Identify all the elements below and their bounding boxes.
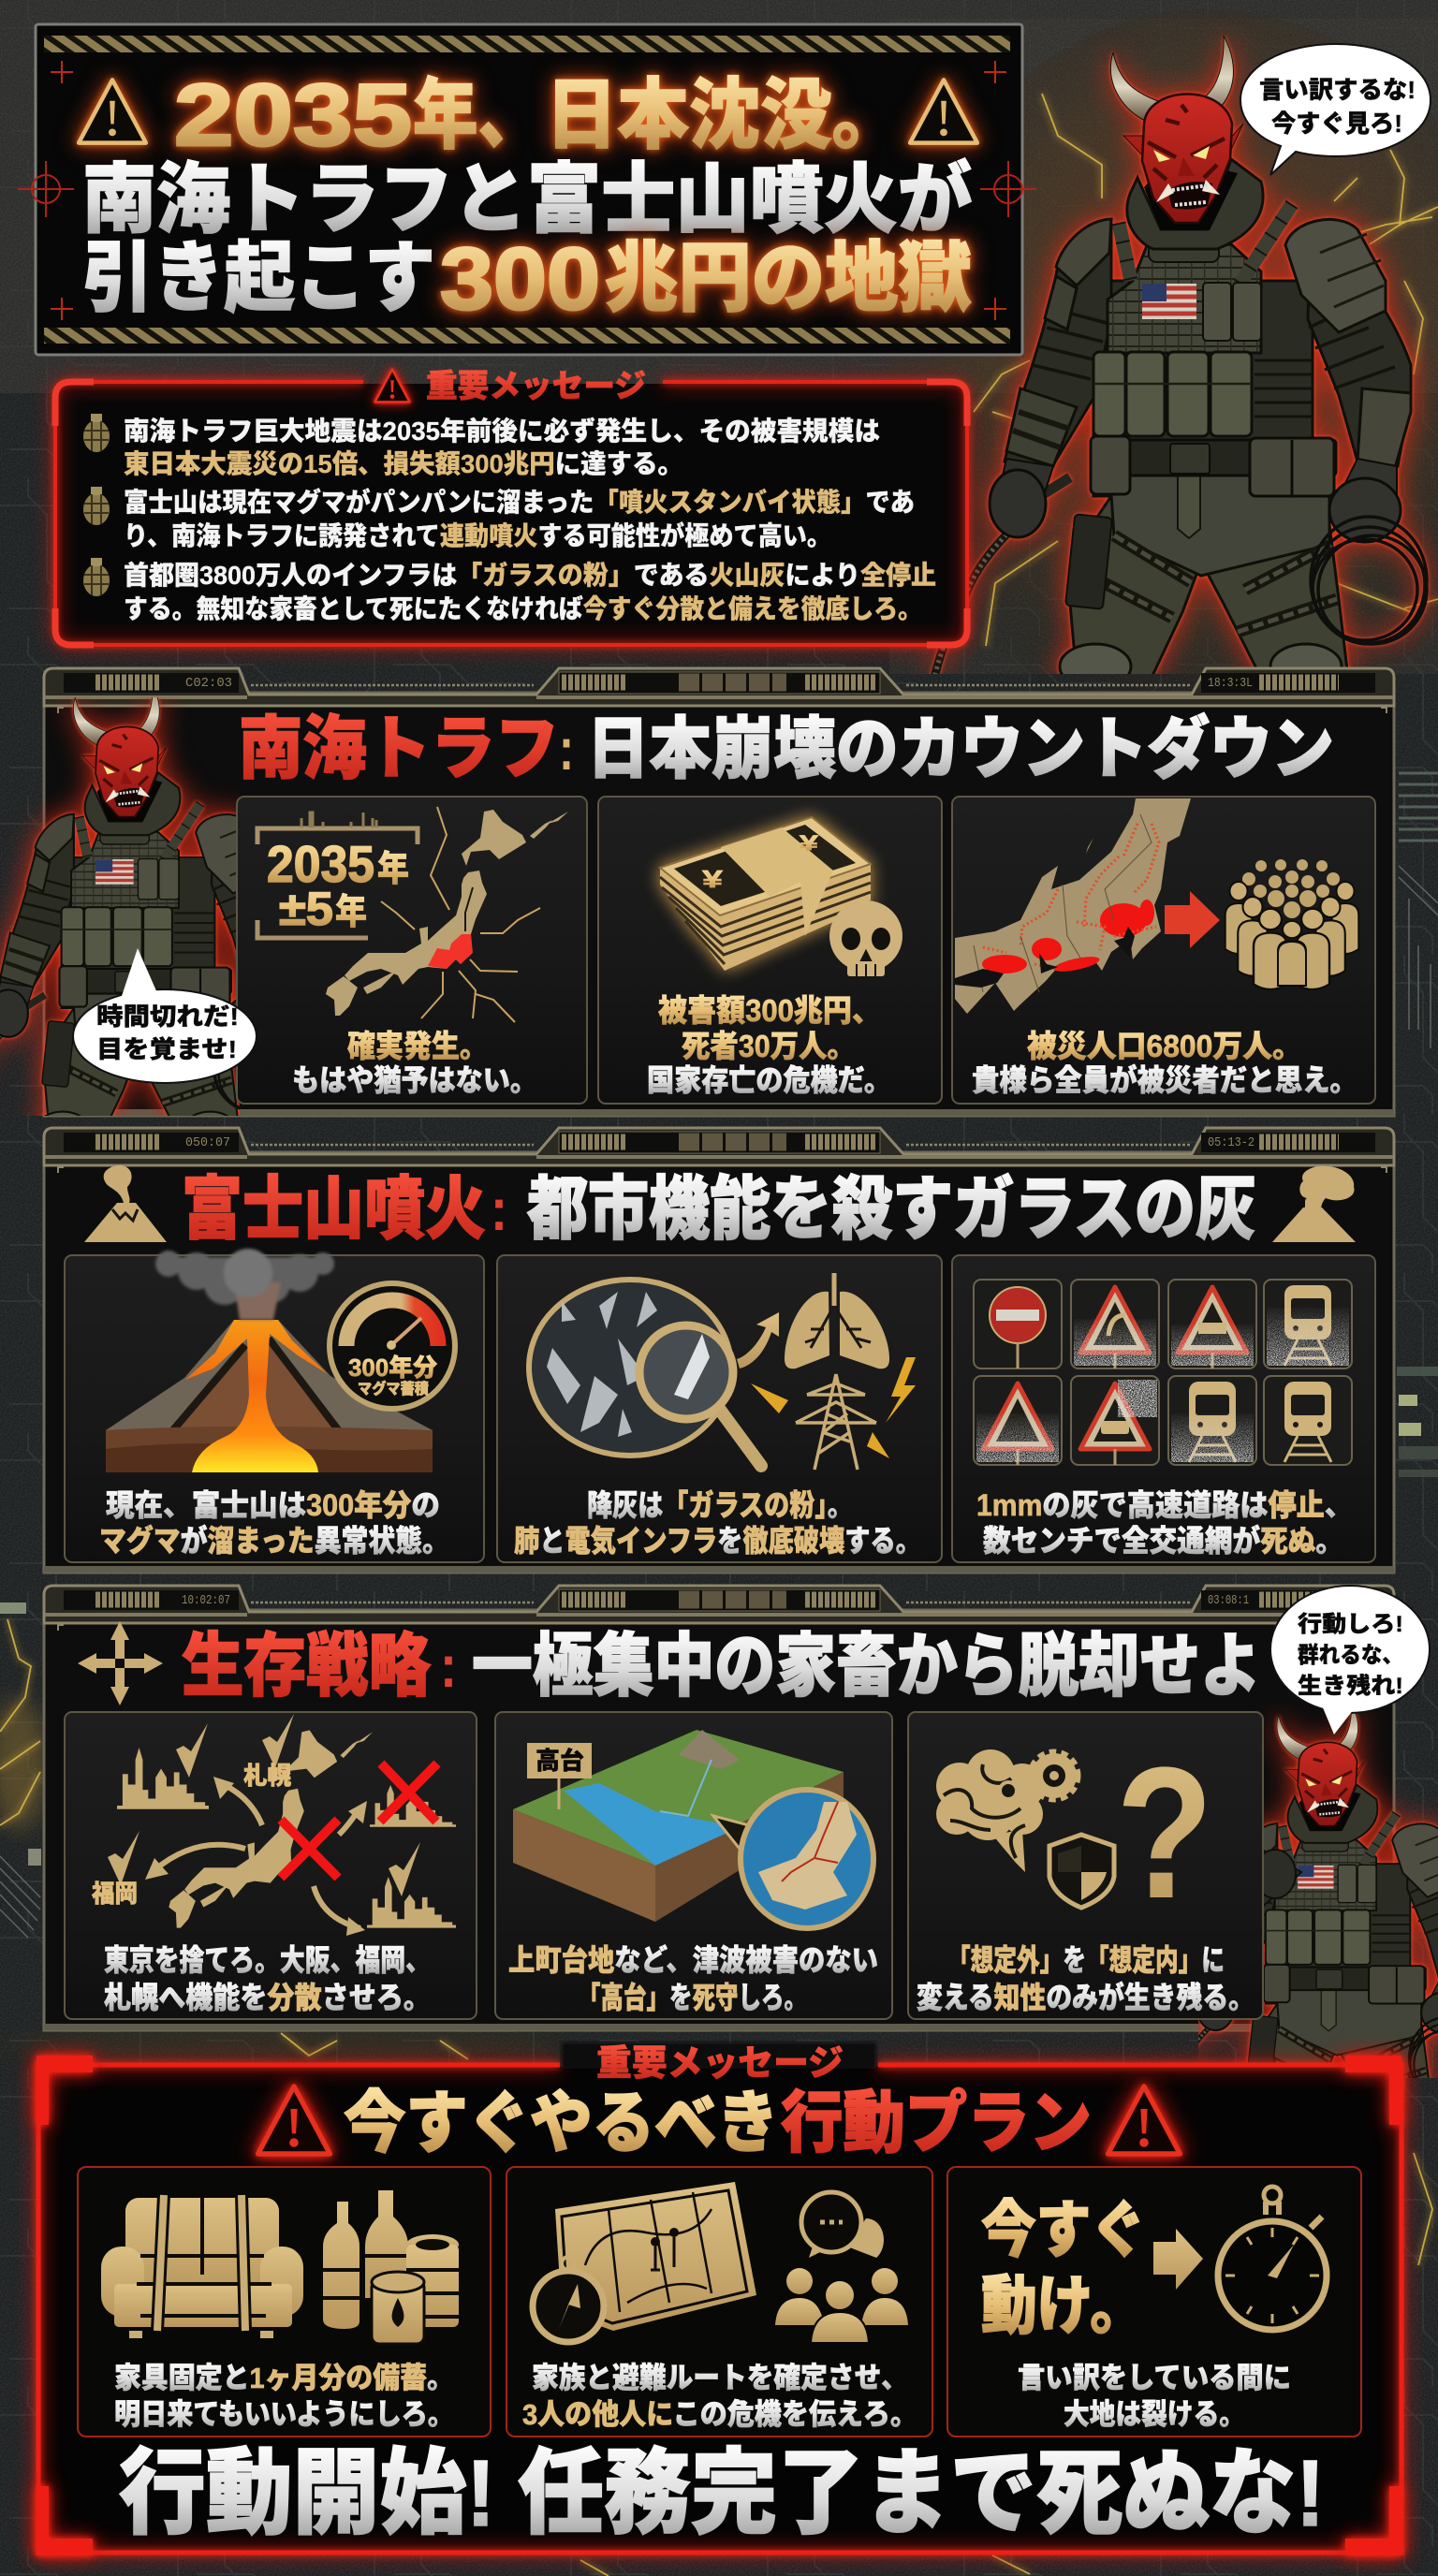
caption: 国家存亡の危機だ。 (647, 1063, 891, 1097)
icon: bottles and cans (323, 2190, 459, 2344)
speech bubble: top right (1240, 44, 1431, 175)
caption (976, 1488, 1353, 1558)
illustration: terrain block (513, 1730, 844, 1922)
card: damage (598, 797, 942, 1104)
card: high ground (495, 1712, 892, 2019)
section heading: 一極集中の家畜から脱却せよ (472, 1627, 1261, 1705)
caption (508, 1943, 878, 2014)
icon: skull (829, 900, 902, 976)
map: dispersal from Tokyo (92, 1714, 456, 1936)
caption: 1mmの灰で高速道路は停止、 (976, 1488, 1353, 1522)
header read-outs: C02:03 (185, 676, 232, 691)
map: dispersal from Tokyo: 福岡 (92, 1880, 138, 1908)
panel: action plan (37, 2042, 1401, 2555)
message text (124, 417, 936, 623)
caption (647, 993, 891, 1097)
arrow (737, 1312, 779, 1368)
panel: Mt Fuji eruption (44, 1128, 1394, 1573)
caption (292, 1029, 537, 1097)
section heading: 南海トラフ (239, 710, 559, 787)
icon: warning right (1108, 2086, 1180, 2154)
caption (514, 1488, 921, 1558)
message text: り、南海トラフに誘発されて連動噴火する可能性が極めて高い。 (124, 520, 831, 550)
icon: crowd (1225, 859, 1358, 989)
icon: warning left (258, 2086, 330, 2154)
speech bubble: right: 生き残れ! (1298, 1673, 1403, 1699)
icon: money stack: ¥ (800, 831, 819, 855)
title line 1: 2035 (174, 66, 412, 164)
icon: volcano right (1272, 1166, 1356, 1242)
icon: money stack: ¥ (702, 865, 724, 893)
icon: shield (1049, 1835, 1114, 1908)
panel: hero title (18, 24, 1036, 355)
icon: brain and gear (936, 1749, 1077, 1872)
card: transport shutdown (952, 1255, 1375, 1562)
section heading (182, 1627, 1261, 1705)
caption: 家族と避難ルートを確定させ、 (532, 2362, 908, 2394)
speech bubble: right: 行動しろ! (1298, 1612, 1403, 1637)
caption (1018, 2362, 1291, 2431)
speech bubble: right: 群れるな、 (1298, 1643, 1403, 1668)
gauge: 300 years of magma: マグマ蓄積 (358, 1380, 429, 1398)
message text: する。無知な家畜として死にたくなければ今すぐ分散と備えを徹底しろ。 (124, 593, 922, 623)
message text: 富士山は現在マグマがパンパンに溜まった「噴火スタンバイ状態」であ (124, 487, 915, 517)
map: dispersal from Tokyo: 札幌 (243, 1762, 291, 1790)
gauge: 300 years of magma (330, 1283, 455, 1409)
caption (972, 1029, 1357, 1097)
caption (104, 1943, 431, 2014)
header read-outs (182, 1593, 1249, 1608)
section heading: 日本崩壊のカウントダウン (587, 712, 1334, 787)
section heading: 生存戦略 (182, 1627, 431, 1705)
character: demon soldier, top right (934, 36, 1427, 689)
header read-outs: 03:08:1 (1208, 1593, 1249, 1608)
section heading (182, 1170, 1256, 1248)
card: prepare (78, 2167, 491, 2437)
slogan: 動け。 (981, 2271, 1146, 2342)
closing slogan: 行動開始! (119, 2441, 495, 2546)
character: demon soldier left (0, 697, 240, 1116)
caption: 被害額300兆円、 (658, 993, 881, 1028)
title line 1: 日本沈没。 (546, 73, 903, 158)
panel: Nankai Trough (0, 668, 1394, 1143)
map inset (713, 1790, 873, 1928)
arrow (1153, 2229, 1203, 2290)
caption: 「高台」を死守しろ。 (578, 1981, 807, 2014)
caption: 東京を捨てろ。大阪、福岡、 (104, 1943, 431, 1977)
icon: speech bubbles (801, 2192, 884, 2258)
caption: 肺と電気インフラを徹底破壊する。 (514, 1524, 921, 1558)
header read-outs: 050:07 (185, 1135, 230, 1150)
caption (114, 2362, 454, 2431)
icon: calendar 2035: ±5 (279, 883, 333, 935)
header read-outs (185, 1135, 1255, 1150)
card: volcanic glass (497, 1255, 942, 1562)
caption: 数センチで全交通網が死ぬ。 (983, 1524, 1343, 1558)
title line 2: 南海トラフと富士山噴火が (82, 157, 972, 242)
header read-outs (185, 676, 1253, 691)
icon: question mark: ? (1116, 1729, 1213, 1938)
card: decentralise (65, 1712, 477, 2019)
slogan: 今すぐ (981, 2195, 1146, 2264)
icon: four way arrows (78, 1621, 163, 1705)
panel heading: 重要メッセージ (596, 2044, 844, 2084)
icon: calendar 2035: 年 (335, 893, 367, 932)
caption: 札幌へ機能を分散させろ。 (104, 1981, 431, 2014)
section heading: : (491, 1176, 507, 1243)
caption: 貴様ら全員が被災者だと思え。 (972, 1063, 1357, 1097)
icon: power pylon (751, 1357, 916, 1470)
caption: 「想定外」を「想定内」に (947, 1943, 1225, 1977)
card: evacuation route (506, 2167, 932, 2437)
icon: warning triangle left (79, 80, 146, 143)
card: intelligence (908, 1712, 1263, 2019)
card: move now (947, 2167, 1361, 2437)
icon: warning triangle right (910, 80, 977, 143)
icon: money stack (660, 817, 871, 971)
speech bubble: left (73, 948, 257, 1083)
speech bubble: right (1270, 1586, 1430, 1734)
caption: 被災人口6800万人。 (1027, 1029, 1302, 1063)
message text: 首都圏3800万人のインフラは「ガラスの粉」である火山灰により全停止 (124, 560, 936, 590)
caption: 死者30万人。 (682, 1029, 856, 1063)
title line 3: 兆円の地獄 (605, 236, 972, 321)
section heading (239, 710, 1334, 787)
icon: compass (533, 2257, 604, 2342)
card: affected population (952, 797, 1375, 1104)
icon: grenades (83, 414, 110, 596)
icon: lungs (785, 1273, 889, 1368)
icon: volcano left (84, 1165, 167, 1242)
title (344, 2086, 1092, 2161)
caption: 降灰は「ガラスの粉」。 (587, 1488, 853, 1522)
caption: 確実発生。 (347, 1029, 488, 1063)
icon: calendar 2035 (257, 812, 418, 938)
icon: armchair strapped (101, 2195, 303, 2338)
speech bubble: left: 時間切れだ! (96, 1003, 239, 1031)
speech bubble: top right: 今すぐ見ろ! (1271, 110, 1402, 138)
caption: 大地は裂ける。 (1064, 2398, 1245, 2431)
caption: 3人の他人にこの危機を伝えろ。 (522, 2398, 917, 2431)
icon: stopwatch (1218, 2187, 1327, 2330)
speech bubble: top right: 言い訳するな! (1259, 76, 1416, 104)
icon: three people (775, 2268, 908, 2343)
header read-outs: 10:02:07 (182, 1593, 230, 1608)
illustration: terrain block: 高台 (536, 1747, 584, 1775)
message text: 東日本大震災の15倍、損失額300兆円に達する。 (124, 449, 683, 478)
speech bubble: left: 目を覚ませ! (96, 1035, 237, 1063)
message heading: 重要メッセージ (426, 369, 646, 404)
title: 今すぐやるべき (344, 2086, 779, 2161)
title line 1: 年、 (413, 73, 543, 158)
section heading: 富士山噴火 (182, 1170, 486, 1248)
icon: magnified ash (529, 1280, 761, 1466)
title line 3: 300 (440, 229, 600, 328)
map: affected area (955, 798, 1191, 1014)
message text: 南海トラフ巨大地震は2035年前後に必ず発生し、その被害規模は (124, 417, 880, 446)
caption: 明日来てもいいようにしろ。 (114, 2398, 454, 2431)
title line 3 (82, 229, 972, 328)
closing slogan (119, 2441, 1325, 2546)
title line 3: 引き起こす (82, 236, 435, 321)
title: 行動プラン (781, 2086, 1092, 2161)
icon grid: traffic signs (974, 1280, 1352, 1465)
caption: 上町台地など、津波被害のない (508, 1943, 878, 1977)
caption: 言い訳をしている間に (1018, 2362, 1291, 2394)
section heading: : (440, 1632, 457, 1700)
gauge: 300 years of magma: 300年分 (348, 1354, 437, 1382)
panel: important message (55, 369, 967, 645)
header read-outs: 05:13-2 (1208, 1135, 1255, 1150)
caption (917, 1943, 1255, 2014)
panel: survival strategy (44, 1586, 1438, 2129)
title line 1 (174, 66, 903, 164)
caption (522, 2362, 917, 2431)
caption: 家具固定と1ヶ月分の備蓄。 (114, 2362, 454, 2394)
closing slogan: 任務完了まで死ぬな! (518, 2441, 1325, 2546)
slogan (981, 2195, 1146, 2342)
caption: 変える知性のみが生き残る。 (917, 1981, 1255, 2014)
icon: warning triangle (374, 370, 410, 402)
icon: calendar 2035: 2035 (267, 835, 374, 893)
arrow (1165, 891, 1220, 948)
map of Japan with cracks (326, 807, 568, 1022)
card: certain occurrence (237, 797, 587, 1104)
header read-outs: 18:3:3L (1208, 676, 1253, 691)
icon: map (555, 2182, 756, 2331)
caption: マグマが溜まった異常状態。 (99, 1524, 449, 1558)
caption (99, 1488, 449, 1558)
character: demon soldier right (1198, 1707, 1438, 2078)
section heading: 都市機能を殺すガラスの灰 (527, 1170, 1256, 1248)
caption: もはや猶予はない。 (292, 1063, 537, 1097)
card: magma (65, 1249, 484, 1562)
illustration: volcano cross section (106, 1249, 433, 1472)
caption: 現在、富士山は300年分の (106, 1488, 440, 1522)
section heading: : (559, 715, 574, 783)
icon: calendar 2035: 年 (377, 850, 409, 889)
